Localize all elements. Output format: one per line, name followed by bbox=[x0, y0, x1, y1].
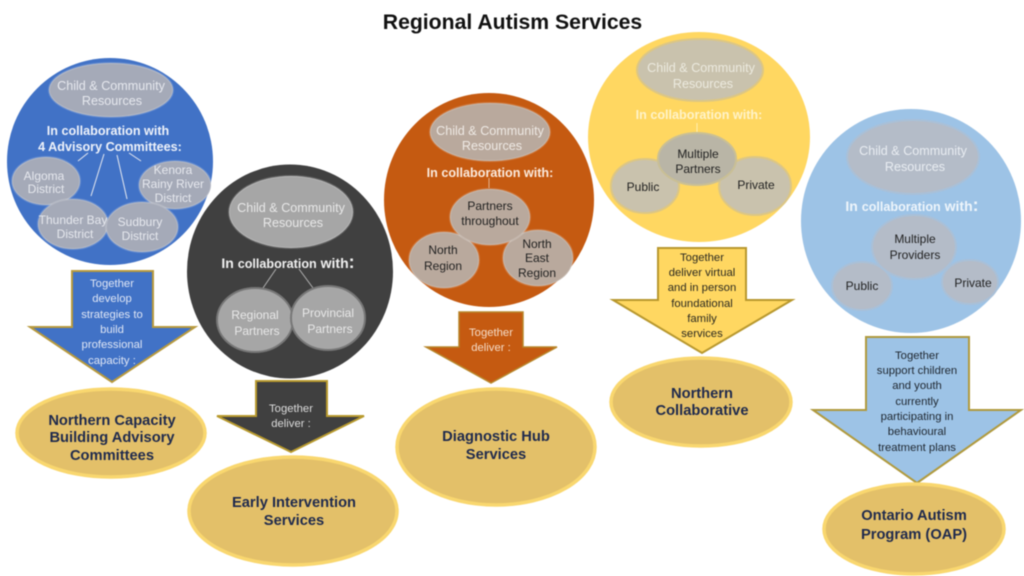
arrow: support children and youth: participating in bbox=[881, 411, 953, 423]
connector lines bbox=[78, 153, 141, 199]
bubble: North Region bbox=[409, 232, 479, 288]
connector line bbox=[488, 178, 490, 188]
arrow: develop strategies: capacity : bbox=[88, 355, 136, 367]
bubble: Public bbox=[611, 159, 679, 213]
bubble: Multiple Partners: Partners bbox=[675, 162, 721, 176]
panel: yellow circle - Northern Collaborative partners bbox=[588, 32, 810, 242]
arrow: develop strategies bbox=[30, 271, 195, 382]
bubble: child and community resources bbox=[637, 39, 763, 101]
arrow: support children and youth: treatment plans bbox=[878, 442, 956, 454]
arrow: deliver virtual and in person foundational family services bbox=[613, 248, 792, 353]
bubble: Kenora Rainy River District: Kenora bbox=[154, 163, 193, 177]
bubble: North East Region bbox=[503, 230, 573, 286]
service: Early Intervention Services bbox=[189, 457, 397, 565]
arrow: support children and youth: currently bbox=[895, 396, 939, 408]
bubble: North Region: Region bbox=[424, 259, 462, 273]
bubble: Thunder Bay District: District bbox=[57, 227, 94, 241]
bubble: child and community resources: Resources bbox=[263, 216, 323, 230]
service: Northern Collaborative bbox=[611, 358, 791, 446]
bubble: Provincial Partners bbox=[291, 286, 365, 350]
arrow: develop strategies: build bbox=[100, 324, 124, 336]
bubble: Private: Private bbox=[737, 178, 775, 192]
title: Regional Autism Services bbox=[383, 11, 642, 34]
arrow: develop strategies: professional bbox=[82, 339, 142, 351]
bubble: Partners throughout bbox=[450, 189, 530, 245]
arrow: deliver virtual and in person foundational family services: family bbox=[687, 313, 717, 325]
bubble: Algoma District: Algoma bbox=[24, 169, 65, 183]
panel: light blue circle - Ontario Autism Program partners bbox=[801, 109, 1021, 333]
service: Northern Collaborative: Collaborative bbox=[655, 403, 749, 419]
bubble: Private bbox=[719, 157, 791, 215]
service: Diagnostic Hub Services bbox=[397, 389, 595, 505]
bubble: Kenora Rainy River District: Rainy River bbox=[142, 177, 204, 191]
bubble: Multiple Partners bbox=[658, 133, 736, 185]
heading: in collaboration with: In collaboration with: bbox=[845, 195, 979, 215]
bubble: Sudbury District: Sudbury bbox=[118, 215, 162, 229]
bubble: Private: Private bbox=[954, 276, 992, 290]
service: Northern Capacity Building Advisory Committees: Committees bbox=[70, 448, 154, 464]
bubble: child and community resources: Resources bbox=[462, 139, 522, 153]
arrow: together deliver (dark): deliver : bbox=[271, 418, 311, 430]
heading: collaboration with 4 advisory committees bbox=[38, 124, 182, 154]
heading: collaboration with 4 advisory committees: In collaboration with bbox=[47, 124, 169, 138]
arrow: together deliver (orange): Together bbox=[469, 327, 513, 339]
bubble: Regional Partners: Regional bbox=[231, 308, 279, 322]
service: Northern Capacity Building Advisory Committees: Northern Capacity bbox=[48, 413, 176, 429]
bubble: child and community resources: Child & Community bbox=[436, 124, 545, 138]
bubble: Provincial Partners: Partners bbox=[307, 322, 353, 336]
bubble: child and community resources: Child & Community bbox=[57, 79, 166, 93]
panel: blue circle - Northern Capacity partners bbox=[7, 58, 213, 265]
service: Early Intervention Services: Services bbox=[264, 513, 324, 529]
bubble: Regional Partners: Partners bbox=[234, 324, 280, 338]
bubble: Public bbox=[832, 262, 892, 310]
bubble: child and community resources: Resources bbox=[885, 160, 945, 174]
arrow: together deliver (orange): deliver : bbox=[471, 342, 511, 354]
bubble: North East Region: Region bbox=[518, 266, 556, 280]
bubble: Kenora Rainy River District bbox=[139, 161, 211, 209]
arrow: support children and youth: and youth bbox=[892, 380, 942, 392]
bubble: Partners throughout: Partners bbox=[467, 199, 513, 213]
service: Northern Capacity Building Advisory Committees: Building Advisory bbox=[49, 430, 175, 446]
bubble: child and community resources: Child & Community bbox=[859, 144, 968, 158]
arrow: develop strategies: Together bbox=[90, 278, 134, 290]
service: Diagnostic Hub Services: Services bbox=[466, 447, 526, 463]
arrow: develop strategies: develop bbox=[92, 293, 132, 305]
arrow: support children and youth: behavioural bbox=[888, 426, 946, 438]
bubble: Thunder Bay District: Thunder Bay bbox=[39, 213, 107, 227]
bubble: Regional Partners bbox=[217, 288, 293, 352]
arrow: support children and youth: Together bbox=[895, 350, 939, 362]
bubble: child and community resources bbox=[229, 176, 353, 248]
bubble: Public: Public bbox=[627, 180, 659, 194]
arrow: deliver virtual and in person foundational family services: deliver virtual bbox=[669, 267, 735, 279]
arrow: support children and youth: support children bbox=[877, 365, 957, 377]
bubble: North East Region: North bbox=[522, 237, 552, 251]
arrow: together deliver (dark) bbox=[217, 381, 364, 452]
heading: collaboration with 4 advisory committees: 4 Advisory Committees: bbox=[38, 140, 182, 154]
arrow: deliver virtual and in person foundational family services: foundational bbox=[671, 298, 733, 310]
arrow: together deliver (orange) bbox=[426, 312, 557, 383]
heading: in collaboration with: In collaboration with: bbox=[221, 252, 355, 272]
bubble: Public: Public bbox=[846, 279, 878, 293]
heading: in collaboration with: In collaboration with: bbox=[636, 108, 762, 122]
bubble: Provincial Partners: Provincial bbox=[302, 306, 354, 320]
arrow: together deliver (dark): Together bbox=[269, 403, 313, 415]
bubble: Kenora Rainy River District: District bbox=[155, 191, 192, 205]
arrow: develop strategies: strategies to bbox=[81, 309, 143, 321]
bubble: child and community resources bbox=[847, 120, 979, 194]
bubble: child and community resources bbox=[49, 63, 173, 117]
bubble: Multiple Providers bbox=[872, 215, 956, 279]
service: Northern Capacity Building Advisory Committees bbox=[17, 389, 205, 477]
bubble: Algoma District bbox=[12, 157, 80, 205]
connector lines bbox=[263, 269, 313, 288]
service: Early Intervention Services: Early Intervention bbox=[232, 495, 356, 511]
bubble: Private bbox=[942, 260, 998, 304]
bubble: child and community resources: Resources bbox=[673, 77, 733, 91]
bubble: North East Region: East bbox=[525, 251, 550, 265]
connector line bbox=[696, 123, 698, 133]
arrow: support children and youth bbox=[813, 337, 1021, 483]
service: Ontario Autism Program (OAP): Program (OAP) bbox=[861, 527, 967, 543]
bubble: Algoma District: District bbox=[28, 182, 65, 196]
service: Diagnostic Hub Services: Diagnostic Hub bbox=[442, 429, 550, 445]
bubble: Multiple Providers: Multiple bbox=[894, 232, 936, 246]
arrow: deliver virtual and in person foundational family services: Together bbox=[680, 252, 724, 264]
bubble: Thunder Bay District bbox=[38, 199, 108, 249]
bubble: child and community resources: Child & Community bbox=[647, 61, 756, 75]
bubble: Sudbury District: District bbox=[122, 229, 159, 243]
service: Ontario Autism Program (OAP): Ontario Autism bbox=[861, 508, 967, 524]
bubble: child and community resources: Child & Community bbox=[237, 201, 346, 215]
bubble: child and community resources: Resources bbox=[82, 94, 142, 108]
bubble: Partners throughout: throughout bbox=[461, 214, 519, 228]
service: Northern Collaborative: Northern bbox=[671, 386, 733, 402]
arrow: deliver virtual and in person foundational family services: services bbox=[681, 328, 723, 340]
heading: in collaboration with: In collaboration with: bbox=[427, 166, 553, 180]
bubble: Multiple Providers: Providers bbox=[890, 248, 940, 262]
bubble: Sudbury District bbox=[106, 202, 178, 252]
arrow: deliver virtual and in person foundational family services: and in person bbox=[668, 282, 736, 294]
bubble: child and community resources bbox=[430, 103, 550, 161]
panel: orange circle - Diagnostic Hub partners bbox=[384, 93, 594, 307]
service: Ontario Autism Program (OAP) bbox=[824, 484, 1004, 574]
bubble: Multiple Partners: Multiple bbox=[677, 147, 719, 161]
bubble: North Region: North bbox=[428, 243, 458, 257]
panel: dark circle - Early Intervention partners bbox=[187, 164, 393, 378]
